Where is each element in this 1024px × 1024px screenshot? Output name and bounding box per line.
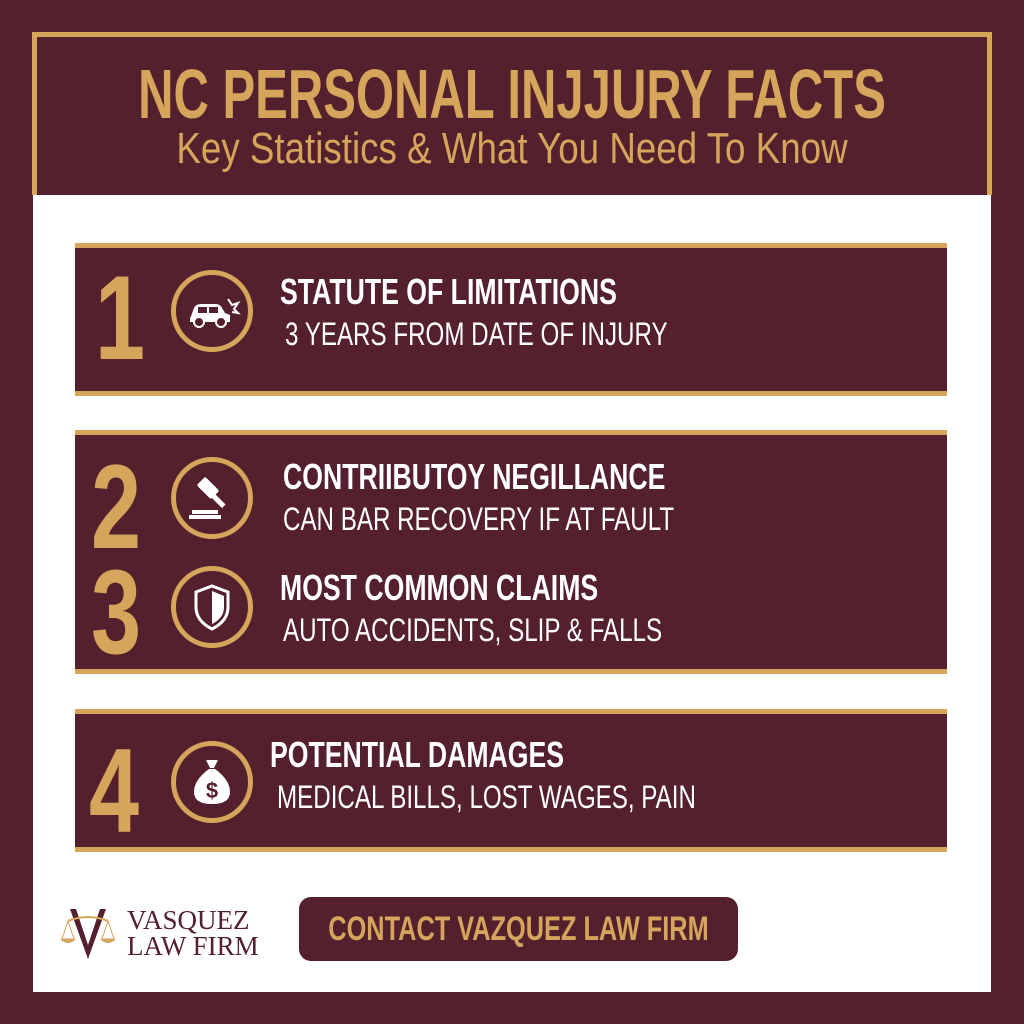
logo text	[127, 905, 259, 961]
logo text: VASQUEZ	[127, 905, 250, 935]
icon: money bag	[171, 741, 253, 823]
logo	[60, 905, 259, 961]
icon: gavel	[171, 457, 253, 539]
logo text: LAW FIRM	[127, 931, 259, 961]
icon: shield	[171, 566, 253, 648]
number 3: 3	[91, 545, 141, 679]
text 4: MEDICAL BILLS, LOST WAGES, PAIN	[277, 779, 696, 815]
text 3: AUTO ACCIDENTS, SLIP & FALLS	[283, 612, 662, 648]
heading 2: CONTRIIBUTOY NEGILLANCE	[283, 456, 665, 497]
button: contact: CONTACT VAZQUEZ LAW FIRM	[328, 910, 709, 948]
white content area	[33, 195, 991, 992]
panel: fact 1	[75, 243, 947, 396]
heading 3: MOST COMMON CLAIMS	[280, 567, 598, 608]
heading 4: POTENTIAL DAMAGES	[270, 734, 564, 775]
text 1: 3 YEARS FROM DATE OF INJURY	[285, 316, 668, 352]
number 2: 2	[91, 440, 141, 574]
header	[32, 32, 992, 195]
text 2: CAN BAR RECOVERY IF AT FAULT	[283, 501, 674, 537]
title: NC PERSONAL INJJURY FACTS	[138, 55, 886, 133]
panel: facts 2 and 3	[75, 430, 947, 674]
button: contact	[299, 897, 738, 961]
icon: money bag: $	[206, 778, 218, 803]
icon: car crash	[171, 270, 253, 352]
number 1: 1	[95, 251, 145, 385]
heading 1: STATUTE OF LIMITATIONS	[280, 271, 617, 312]
subtitle: Key Statistics & What You Need To Know	[176, 124, 848, 173]
icon: scales V	[60, 909, 116, 959]
panel: fact 4	[75, 709, 947, 852]
number 4: 4	[89, 724, 139, 858]
